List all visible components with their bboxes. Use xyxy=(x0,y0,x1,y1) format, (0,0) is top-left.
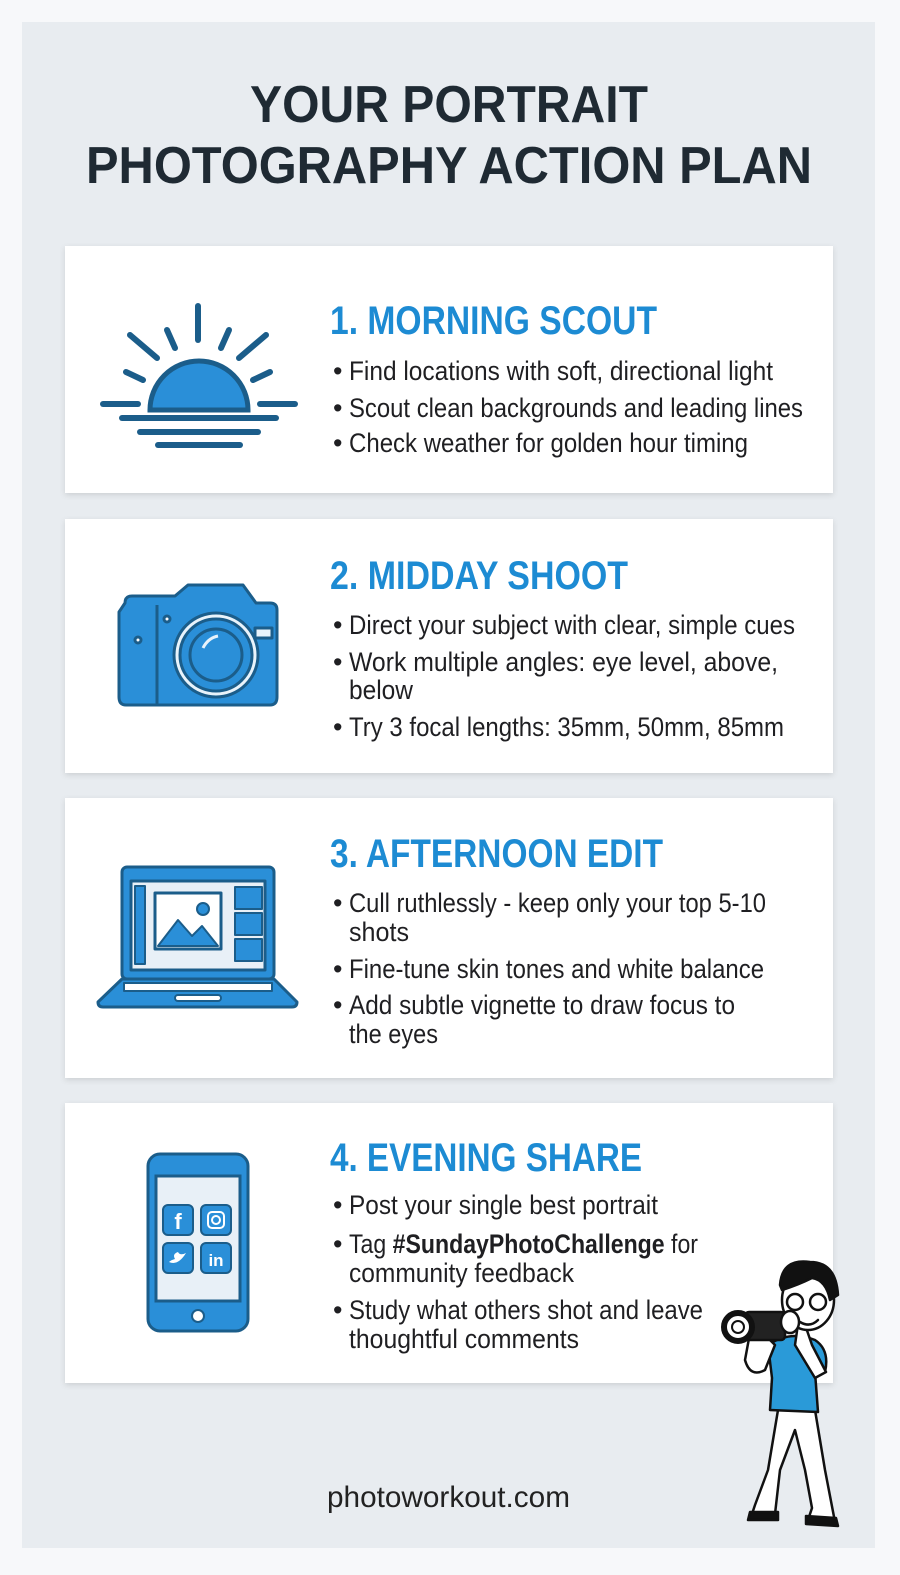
bullets: • xyxy=(333,647,342,677)
bullets: Work multiple angles: eye level, above, xyxy=(349,647,778,677)
icon: sunrise xyxy=(103,306,295,445)
bullets: Find locations with soft, directional light xyxy=(349,356,773,386)
bullets: • xyxy=(333,1229,342,1259)
bullets: below xyxy=(349,675,413,705)
bullets xyxy=(333,1190,703,1354)
heading: 3. AFTERNOON EDIT xyxy=(330,832,663,876)
bullets: thoughtful comments xyxy=(349,1324,579,1354)
bullets: • xyxy=(333,393,342,423)
bullets: • xyxy=(333,428,342,458)
bullets xyxy=(333,888,766,1049)
bullets: Add subtle vignette to draw focus to xyxy=(349,990,735,1020)
icon: phone with social: in xyxy=(208,1251,224,1270)
bullets: shots xyxy=(349,917,409,947)
bullets: Tag #SundayPhotoChallenge for xyxy=(349,1229,698,1259)
bullets: Cull ruthlessly - keep only your top 5-10 xyxy=(349,888,766,918)
heading: 1. MORNING SCOUT xyxy=(330,299,657,343)
bullets: • xyxy=(333,356,342,386)
bullets: • xyxy=(333,888,342,918)
bullets: • xyxy=(333,1190,342,1220)
bullets: • xyxy=(333,1295,342,1325)
bullets: Study what others shot and leave xyxy=(349,1295,703,1325)
bullets: Direct your subject with clear, simple cues xyxy=(349,610,795,640)
bullets: • xyxy=(333,610,342,640)
bullets xyxy=(333,356,803,458)
bullets: • xyxy=(333,954,342,984)
panel: morning scout xyxy=(65,246,833,493)
bullets: • xyxy=(333,712,342,742)
heading: 2. MIDDAY SHOOT xyxy=(330,554,628,598)
icon: phone with social: f xyxy=(174,1209,182,1234)
bullets: Fine-tune skin tones and white balance xyxy=(349,954,764,984)
bullets: Scout clean backgrounds and leading lines xyxy=(349,393,803,423)
icon: camera xyxy=(119,585,277,705)
illustration: photographer character xyxy=(724,1261,838,1526)
icon: phone with social xyxy=(148,1154,248,1331)
bullets: community feedback xyxy=(349,1258,574,1288)
bullets: Try 3 focal lengths: 35mm, 50mm, 85mm xyxy=(349,712,784,742)
title: YOUR PORTRAIT xyxy=(250,76,648,134)
bullets: • xyxy=(333,990,342,1020)
title: PHOTOGRAPHY ACTION PLAN xyxy=(86,137,812,195)
panel: afternoon edit xyxy=(65,798,833,1078)
bullets: Post your single best portrait xyxy=(349,1190,658,1220)
bullets: Check weather for golden hour timing xyxy=(349,428,748,458)
panel: evening share xyxy=(65,1103,833,1383)
bullets: the eyes xyxy=(349,1019,438,1049)
heading: 4. EVENING SHARE xyxy=(330,1136,642,1180)
bullets xyxy=(333,610,795,742)
footer url: photoworkout.com xyxy=(327,1481,570,1514)
panel: midday shoot xyxy=(65,519,833,773)
title xyxy=(86,76,812,195)
icon: laptop xyxy=(98,867,297,1007)
